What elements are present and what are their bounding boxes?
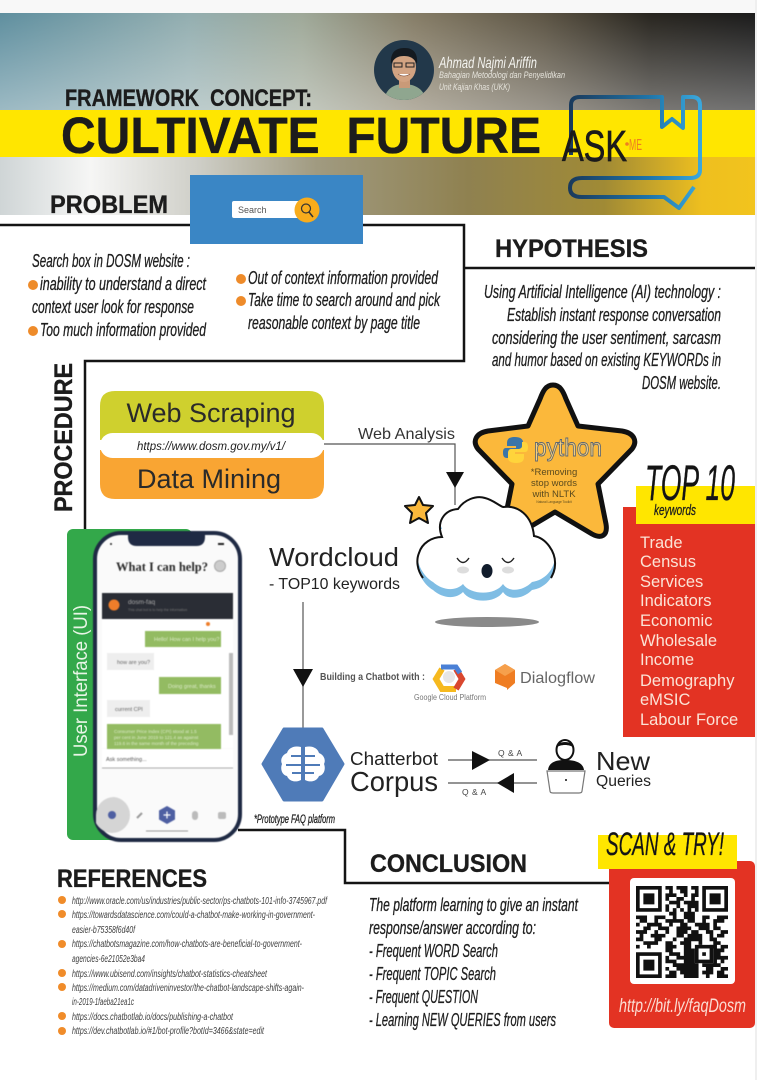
heading: hypothesis: HYPOTHESIS xyxy=(495,235,648,263)
references list: https://dev.chatbotlab.io/#1/bot-profile?botId=3466&state=edit xyxy=(72,1026,265,1037)
phone mockup: dosm-faq xyxy=(128,599,155,606)
conclusion text: - Frequent WORD Search xyxy=(369,941,498,961)
arrows: question and answer exchange xyxy=(448,748,537,797)
panel: top 10 keywords: Census xyxy=(640,553,696,571)
prototype note: *Prototype FAQ platform xyxy=(254,812,335,826)
conclusion text xyxy=(369,895,579,1030)
heading: problem: PROBLEM xyxy=(50,191,168,219)
heading: conclusion: CONCLUSION xyxy=(370,850,527,878)
search box panel: Search xyxy=(238,205,267,215)
author details: Ahmad Najmi Ariffin xyxy=(438,55,537,72)
phone mockup: per cent in June 2019 to 121.4 as against xyxy=(114,735,199,740)
frame lines xyxy=(0,225,755,883)
phone mockup: What I can help? xyxy=(116,559,208,574)
hypothesis text xyxy=(484,282,721,393)
problem text: reasonable context by page title xyxy=(248,313,420,333)
phone mockup: current CPI xyxy=(115,707,143,713)
conclusion text: - Frequent QUESTION xyxy=(369,987,479,1007)
conclusion text: - Frequent TOPIC Search xyxy=(369,964,496,984)
references list: https://medium.com/datadriveninvestor/the-chatbot-landscape-shifts-again- xyxy=(72,983,304,994)
phone mockup: Ask something... xyxy=(106,757,147,763)
heading: wordcloud xyxy=(269,542,400,593)
icon: user at laptop xyxy=(547,740,585,793)
problem text: context user look for response xyxy=(32,297,194,317)
heading: wordcloud: - TOP10 keywords xyxy=(269,576,400,593)
problem text: inability to understand a direct xyxy=(40,274,207,294)
problem text xyxy=(28,251,441,340)
panel: top 10 keywords: Indicators xyxy=(640,592,712,610)
icon: python logo xyxy=(503,437,528,463)
phone mockup: Consumer Price Index (CPI) stood at 1.5 xyxy=(114,729,197,734)
panel: top 10 keywords: Trade xyxy=(640,534,682,552)
panel: top 10 keywords: Labour Force xyxy=(640,711,738,729)
problem text: Too much information provided xyxy=(40,320,207,340)
star: python: stop words xyxy=(531,478,577,489)
icon: small star xyxy=(405,497,433,523)
header banner xyxy=(0,13,755,215)
chatbot building caption: Building a Chatbot with : xyxy=(320,672,425,683)
panel: scan and try xyxy=(598,826,755,1028)
panel: top 10 keywords: Economic xyxy=(640,612,712,630)
references list: https://chatbotsmagazine.com/how-chatbots-are-beneficial-to-government- xyxy=(72,939,302,950)
panel: top 10 keywords: Services xyxy=(640,573,703,591)
new queries label: Queries xyxy=(596,773,651,790)
qr code xyxy=(630,878,735,984)
star: python xyxy=(475,385,635,536)
web scraping and data mining panel: https://www.dosm.gov.my/v1/ xyxy=(137,441,287,453)
author details xyxy=(438,55,565,93)
chatterbot corpus label: Corpus xyxy=(350,766,438,797)
panel: top 10 keywords: keywords xyxy=(654,502,696,519)
phone mockup xyxy=(95,533,240,840)
logo: ask me book xyxy=(562,97,700,208)
logo: ask me book: ASK xyxy=(562,122,627,171)
star: python: Natural Language Toolkit xyxy=(536,500,572,504)
conclusion text: response/answer according to: xyxy=(369,918,536,938)
panel: top 10 keywords xyxy=(623,455,755,737)
arrow: wordcloud to chatterbot xyxy=(293,602,313,730)
web scraping and data mining panel: Data Mining xyxy=(137,464,281,494)
references list: http://www.oracle.com/us/industries/public-sector/ps-chatbots-101-info-3745967.pdf xyxy=(72,896,328,907)
search box panel xyxy=(190,175,363,244)
icon: dialogflow: Dialogflow xyxy=(520,670,595,687)
arrows: question and answer exchange: Q & A xyxy=(498,748,523,758)
title: framework concept: FRAMEWORK CONCEPT: xyxy=(65,85,312,112)
icon: google cloud platform xyxy=(414,667,486,702)
star: python: *Removing xyxy=(531,467,577,478)
icon: chatterbot brain hexagon xyxy=(263,729,343,800)
references list xyxy=(58,896,328,1037)
author details: Unit Kajian Khas (UKK) xyxy=(439,82,510,93)
star: python: with NLTK xyxy=(531,489,576,500)
conclusion text: The platform learning to give an instant xyxy=(369,895,579,915)
heading: wordcloud: Wordcloud xyxy=(269,542,399,572)
cloud shadow xyxy=(435,617,539,627)
author portrait xyxy=(374,40,434,100)
arrows: question and answer exchange: Q & A xyxy=(462,787,487,797)
references list: https://www.ubisend.com/insights/chatbot-statistics-cheatsheet xyxy=(72,969,268,980)
chatterbot corpus label xyxy=(350,749,438,797)
phone mockup: Doing great, thanks xyxy=(168,684,216,690)
star: python: python xyxy=(534,434,602,462)
panel: top 10 keywords: Demography xyxy=(640,672,735,690)
references list: agencies-6e21052e3ba4 xyxy=(72,954,145,965)
references list: in-2019-1faeba21ea1c xyxy=(72,997,134,1008)
phone mockup: how are you? xyxy=(117,660,150,666)
phone mockup: Hello! How can I help you? xyxy=(154,637,219,643)
icon: google cloud platform: Google Cloud Platform xyxy=(414,693,486,702)
panel: top 10 keywords: Income xyxy=(640,651,694,669)
web scraping and data mining panel: Web Scraping xyxy=(126,398,296,428)
web analysis connector: Web Analysis xyxy=(358,426,455,443)
new queries label xyxy=(596,746,651,790)
logo: ask me book: ME xyxy=(629,137,642,154)
chatterbot corpus label: Chatterbot xyxy=(350,749,438,769)
heading: references: REFERENCES xyxy=(57,865,207,893)
references list: https://towardsdatascience.com/could-a-chatbot-make-working-in-government- xyxy=(72,910,315,921)
web analysis connector xyxy=(324,426,464,505)
heading: procedure: PROCEDURE xyxy=(50,363,78,512)
phone mockup: This chat bot is to help the information xyxy=(128,608,187,612)
panel: top 10 keywords: eMSIC xyxy=(640,691,691,709)
new queries label: New xyxy=(596,746,650,776)
panel: user interface label: User Interface (UI) xyxy=(70,605,92,757)
problem text: Search box in DOSM website : xyxy=(32,251,190,271)
problem text: Take time to search around and pick xyxy=(248,290,441,310)
author details: Bahagian Metodologi dan Penyelidikan xyxy=(439,70,565,81)
problem text: Out of context information provided xyxy=(248,268,439,288)
panel: user interface label xyxy=(67,529,192,840)
conclusion text: - Learning NEW QUERIES from users xyxy=(369,1010,556,1030)
icon: sleeping cloud xyxy=(417,489,555,601)
title: cultivate future: CULTIVATE FUTURE xyxy=(61,107,541,164)
web scraping and data mining panel xyxy=(100,391,324,499)
panel: top 10 keywords: Wholesale xyxy=(640,632,717,650)
icon: dialogflow xyxy=(495,664,595,690)
references list: https://docs.chatbotlab.io/docs/publishing-a-chatbot xyxy=(72,1012,234,1023)
references list: easier-b75358f6d40f xyxy=(72,925,136,936)
phone mockup: 119.6 in the same month of the preceding xyxy=(114,741,199,746)
